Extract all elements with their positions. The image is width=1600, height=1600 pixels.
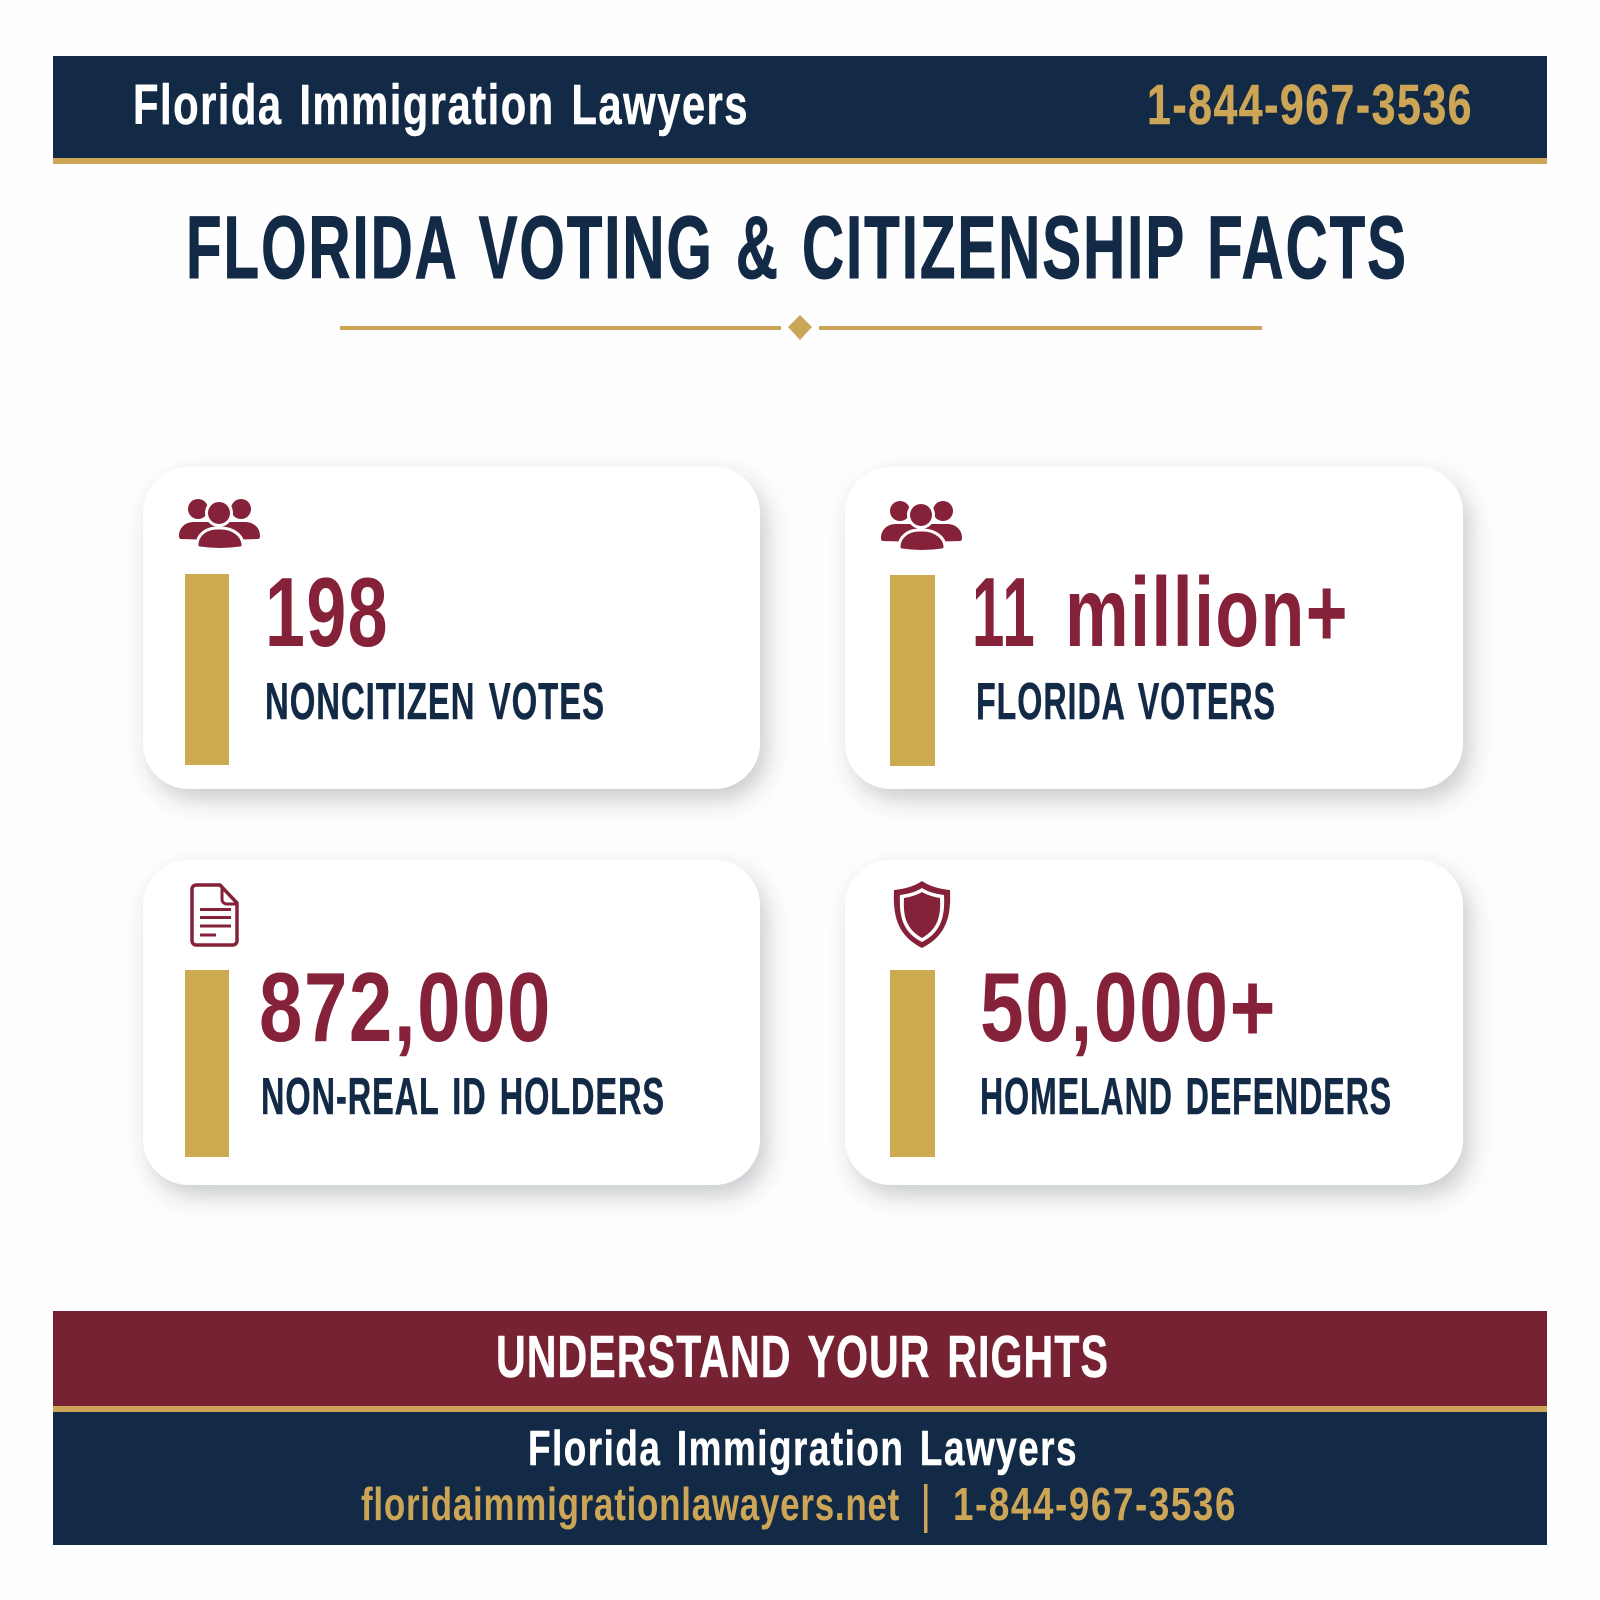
stat number: million+ xyxy=(1065,557,1349,667)
icon: people group xyxy=(881,501,962,552)
stat label: NONCITIZEN VOTES xyxy=(265,673,605,731)
panel: homeland defenders xyxy=(845,860,1463,1185)
stat label: NON-REAL ID HOLDERS xyxy=(261,1068,665,1126)
accent bar xyxy=(185,970,229,1157)
header banner xyxy=(53,56,1547,164)
header firm name: Florida Immigration Lawyers xyxy=(133,73,749,137)
stat number: 198 xyxy=(265,557,389,667)
footer firm name: Florida Immigration Lawyers xyxy=(528,1422,1078,1476)
stat number: 11 xyxy=(972,557,1036,667)
footer phone number: 1-844-967-3536 xyxy=(953,1478,1237,1530)
panel: florida voters xyxy=(845,467,1463,789)
header phone number: 1-844-967-3536 xyxy=(1147,73,1473,137)
icon: document xyxy=(192,885,237,945)
accent bar xyxy=(185,574,229,765)
panel: noncitizen votes xyxy=(143,467,760,789)
title divider with diamond xyxy=(340,315,1262,340)
panel: non-real id holders xyxy=(143,860,760,1185)
stat number: 50,000+ xyxy=(980,952,1277,1062)
accent bar xyxy=(890,575,935,766)
footer banner xyxy=(53,1311,1547,1545)
icon: shield xyxy=(894,881,950,948)
accent bar xyxy=(890,970,935,1157)
stat number xyxy=(972,557,1349,667)
stat number: 872,000 xyxy=(259,952,552,1062)
footer separator xyxy=(924,1484,928,1533)
icon: people group xyxy=(179,499,260,550)
footer call to action: UNDERSTAND YOUR RIGHTS xyxy=(496,1324,1109,1390)
footer website: floridaimmigrationlawayers.net xyxy=(361,1478,900,1530)
stat label: FLORIDA VOTERS xyxy=(976,673,1276,731)
